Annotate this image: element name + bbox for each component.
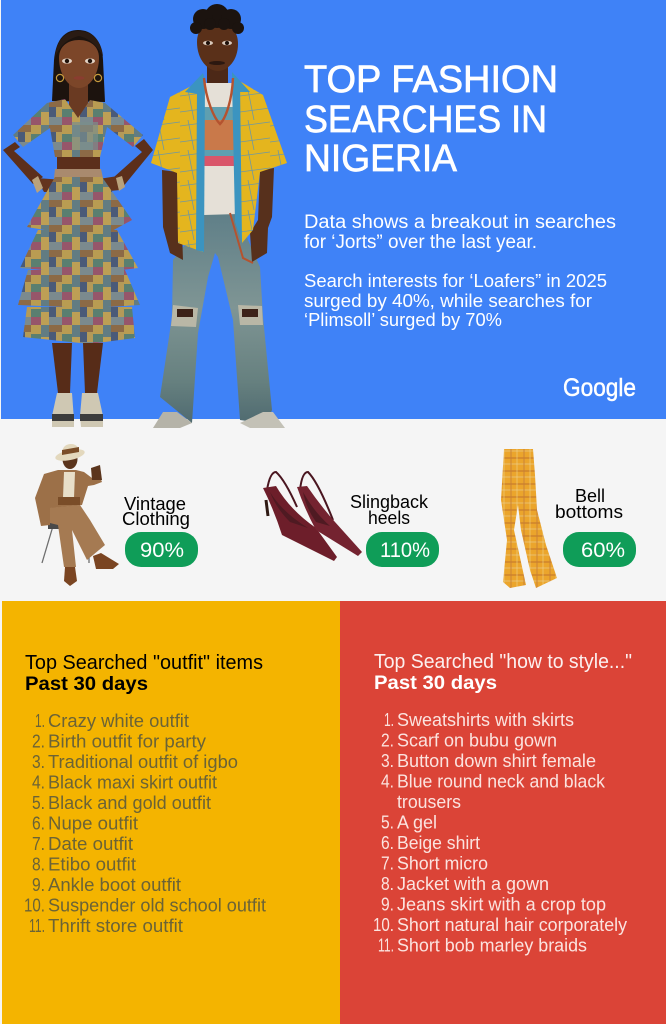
- ranked list: Black and gold outfit: [48, 793, 211, 813]
- skirt tiers: [27, 177, 132, 232]
- label: bottoms: [555, 502, 623, 522]
- legs: [52, 343, 72, 393]
- icon: burgundy slingback heels: [263, 472, 362, 561]
- ranked list: 2.: [381, 730, 394, 750]
- badge: 60%: 60%: [581, 539, 625, 562]
- ranked list: Crazy white outfit: [48, 711, 189, 731]
- label: Vintage: [124, 494, 186, 514]
- ranked list: 7.: [381, 854, 394, 874]
- ranked list: 1.: [35, 711, 45, 731]
- ranked list: 1.: [384, 710, 394, 730]
- ranked list: Short bob marley braids: [397, 936, 587, 956]
- bodice: [57, 155, 100, 170]
- ranked list: Jacket with a gown: [397, 874, 549, 894]
- jeans: [160, 213, 272, 424]
- title: TOP FASHION: [304, 59, 558, 101]
- ranked list: Sweatshirts with skirts: [397, 710, 574, 730]
- heading: [374, 651, 632, 694]
- bead chain: [230, 213, 253, 263]
- badge: 110%: [366, 532, 439, 567]
- text block: jorts breakout: [304, 212, 616, 253]
- ranked list: Nupe outfit: [48, 814, 138, 834]
- panel: blue header: [1, 0, 666, 419]
- item: vintage clothing: [35, 444, 198, 586]
- ranked list: Short micro: [397, 854, 488, 874]
- ranked list: Date outfit: [48, 834, 133, 854]
- text block: loafers and plimsoll: ‘Plimsoll’ surged by 70%: [304, 309, 502, 330]
- item: bell bottoms: [501, 449, 636, 588]
- label: [122, 494, 190, 529]
- ranked list: A gel: [397, 812, 437, 832]
- badge: 90%: [125, 532, 198, 567]
- ranked list: Thrift store outfit: [48, 916, 183, 936]
- item: slingback heels: [263, 472, 439, 567]
- title: SEARCHES IN: [304, 99, 547, 141]
- text block: jorts breakout: Data shows a breakout in searches: [304, 212, 616, 233]
- ranked list: Suspender old school outfit: [48, 896, 266, 916]
- ranked list: 11.: [29, 916, 45, 936]
- neck and tee: [207, 58, 228, 85]
- ranked list: Birth outfit for party: [48, 732, 206, 752]
- sneakers: [153, 412, 192, 428]
- ranked list: 6.: [32, 814, 45, 834]
- label: Bell: [575, 486, 605, 506]
- ranked list: Button down shirt female: [397, 751, 596, 771]
- bead necklace: [204, 78, 233, 124]
- heading: Top Searched "how to style...": [374, 651, 632, 673]
- ranked list: 8.: [32, 854, 45, 874]
- ranked list: 6.: [381, 833, 394, 853]
- ranked list: 2.: [32, 732, 45, 752]
- ranked list: 10.: [373, 915, 394, 935]
- icon: plaid bell bottom trousers: [501, 449, 557, 588]
- text block: loafers and plimsoll: Search interests for ‘Loafers” in 2025: [304, 270, 607, 291]
- ranked list: 10.: [24, 896, 45, 916]
- ranked list: 3.: [381, 751, 394, 771]
- illustration: woman in patchwork dress: [3, 30, 153, 427]
- illustration: man in yellow shirt and jeans: [151, 4, 287, 428]
- heading: Top Searched "outfit" items: [25, 652, 263, 674]
- head: [197, 24, 238, 71]
- ranked list: Traditional outfit of igbo: [48, 752, 238, 772]
- ranked list: 8.: [381, 874, 394, 894]
- text block: jorts breakout: for ‘Jorts” over the last year.: [304, 232, 537, 253]
- ranked list: Blue round neck and black: [397, 772, 606, 792]
- heading: Past 30 days: [25, 674, 148, 695]
- label: [555, 486, 623, 522]
- label: Clothing: [122, 509, 190, 529]
- ranked list: Short natural hair corporately: [397, 915, 627, 935]
- ranked list: Jeans skirt with a crop top: [397, 894, 606, 914]
- icon: seated man in brown suit: [35, 444, 119, 586]
- ranked list: Etibo outfit: [48, 854, 136, 874]
- sneakers: [52, 393, 74, 427]
- ranked list: Ankle boot outfit: [48, 875, 181, 895]
- ranked list: 4.: [381, 772, 394, 792]
- ranked list: 11.: [378, 936, 394, 956]
- ranked list: 5.: [32, 793, 45, 813]
- badge: 110%: 110%: [380, 539, 430, 562]
- text block: loafers and plimsoll: [304, 270, 607, 330]
- ranked list: Scarf on bubu gown: [397, 730, 557, 750]
- ranked list: 5.: [381, 812, 394, 832]
- panel: trending items row: [35, 444, 636, 588]
- title: NIGERIA: [304, 138, 458, 180]
- heading: [25, 652, 263, 695]
- badge: 90%: 90%: [140, 539, 184, 562]
- arms: [3, 142, 43, 184]
- Google logo: Google: [563, 374, 636, 402]
- ranked list: [373, 710, 627, 956]
- label: Slingback: [350, 492, 429, 512]
- panel: top searched how to style: [340, 601, 666, 1024]
- ranked list: 7.: [32, 834, 45, 854]
- ranked list: 9.: [32, 875, 45, 895]
- ranked list: 9.: [381, 894, 394, 914]
- arms: [162, 170, 183, 260]
- ranked list: 3.: [32, 752, 45, 772]
- panel: top searched outfit items: [2, 601, 340, 1024]
- ranked list: Black maxi skirt outfit: [48, 772, 217, 792]
- text block: loafers and plimsoll: surged by 40%, while searches for: [304, 290, 592, 311]
- shirt: [151, 80, 203, 252]
- label: [350, 492, 429, 528]
- ranked list: Beige shirt: [397, 833, 480, 853]
- ranked list: 4.: [32, 772, 45, 792]
- ranked list: trousers: [397, 792, 461, 812]
- title: [304, 59, 558, 180]
- label: heels: [368, 508, 410, 528]
- ranked list: [24, 711, 266, 936]
- heading: Past 30 days: [374, 673, 497, 694]
